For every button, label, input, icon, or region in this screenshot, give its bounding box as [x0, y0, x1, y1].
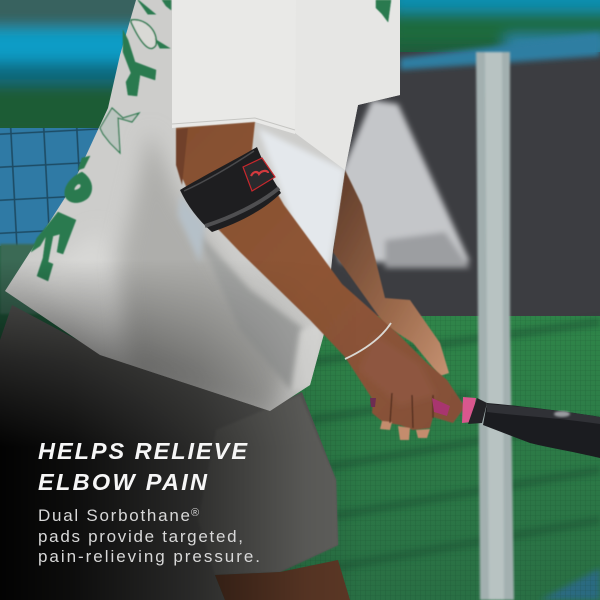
right sleeve — [290, 0, 400, 170]
heading: HELPS RELIEVE — [38, 438, 248, 464]
text block: headline and description — [38, 438, 260, 566]
shorts — [0, 305, 338, 600]
dinosaur — [123, 30, 156, 96]
pickleball paddle — [370, 397, 600, 458]
letter e — [65, 172, 92, 203]
description — [38, 506, 260, 566]
description: pain-relieving pressure. — [38, 547, 260, 566]
small bull — [100, 108, 139, 153]
robot figure — [31, 212, 76, 281]
fingers — [380, 421, 392, 430]
bracelet — [345, 323, 391, 359]
background: blue net on the left — [0, 128, 115, 314]
elbow strap with logo — [180, 147, 281, 232]
shirt print: green graphics — [31, 0, 391, 281]
heading — [38, 438, 248, 495]
background: dark windscreen with white logo — [290, 33, 600, 318]
background: green court — [280, 316, 600, 600]
description: Dual Sorbothane — [38, 506, 190, 525]
sleeve print — [376, 0, 391, 22]
description: pads provide targeted, — [38, 527, 243, 546]
description: ® — [191, 507, 199, 519]
arm and hand behind the body — [333, 170, 449, 376]
left sleeve — [172, 0, 296, 134]
leg — [215, 560, 350, 600]
elbow arm and hand — [176, 122, 465, 440]
background: fence post — [476, 52, 514, 600]
heading: ELBOW PAIN — [38, 469, 208, 495]
dark text-backing gradient — [0, 267, 316, 600]
t-shirt — [5, 0, 400, 415]
